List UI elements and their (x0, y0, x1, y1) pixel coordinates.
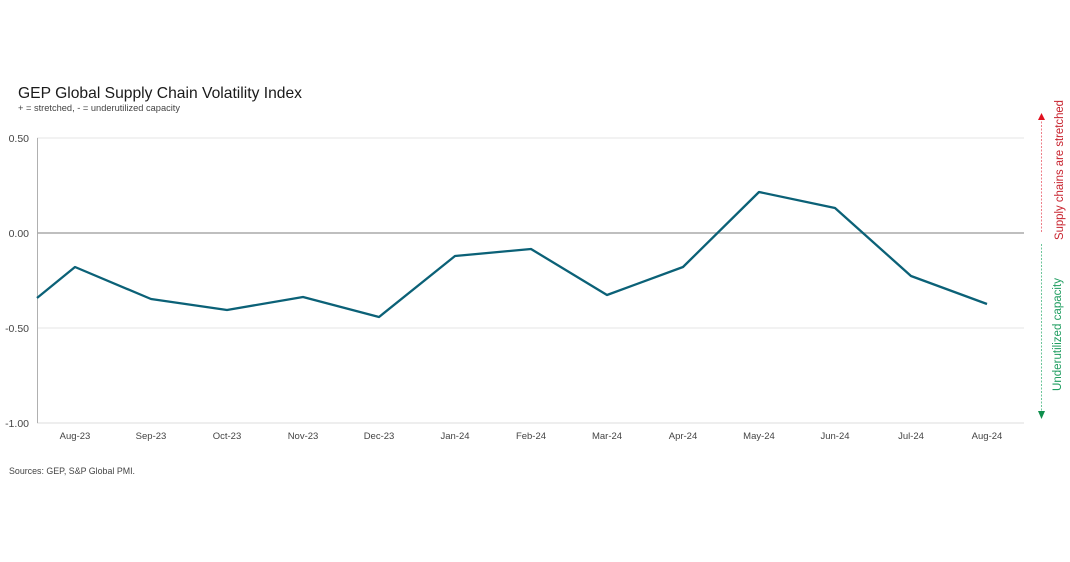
x-axis labels: Aug-24 (972, 431, 1002, 442)
x-axis labels: Feb-24 (516, 431, 546, 442)
x-axis labels: Jun-24 (820, 431, 850, 442)
arrow: underutilized (1038, 244, 1045, 419)
subtitle: + = stretched, - = underutilized capacity (18, 103, 181, 113)
label: supply chains are stretched: Supply chains are stretched (1054, 100, 1066, 240)
x-axis labels: Apr-24 (669, 431, 697, 442)
x-axis labels: Sep-23 (136, 431, 166, 442)
x-axis labels: Dec-23 (364, 431, 394, 442)
x-axis labels (60, 431, 1002, 442)
arrow: stretched (1038, 113, 1045, 232)
y-axis labels (5, 133, 29, 430)
line chart (5, 133, 1024, 442)
label: underutilized capacity: Underutilized capacity (1052, 278, 1064, 391)
x-axis labels: Nov-23 (288, 431, 318, 442)
data line (37, 192, 987, 317)
x-axis labels: Mar-24 (592, 431, 622, 442)
title: GEP Global Supply Chain Volatility Index (18, 85, 302, 102)
y-axis labels: -0.50 (5, 323, 29, 335)
y-axis labels: 0.00 (9, 228, 29, 240)
x-axis labels: Oct-23 (213, 431, 241, 442)
source note: Sources: GEP, S&P Global PMI. (9, 466, 135, 477)
x-axis labels: Jan-24 (440, 431, 470, 442)
y-axis labels: 0.50 (9, 133, 29, 145)
y-axis labels: -1.00 (5, 418, 29, 430)
x-axis labels: Aug-23 (60, 431, 90, 442)
x-axis labels: May-24 (743, 431, 775, 442)
x-axis labels: Jul-24 (898, 431, 924, 442)
